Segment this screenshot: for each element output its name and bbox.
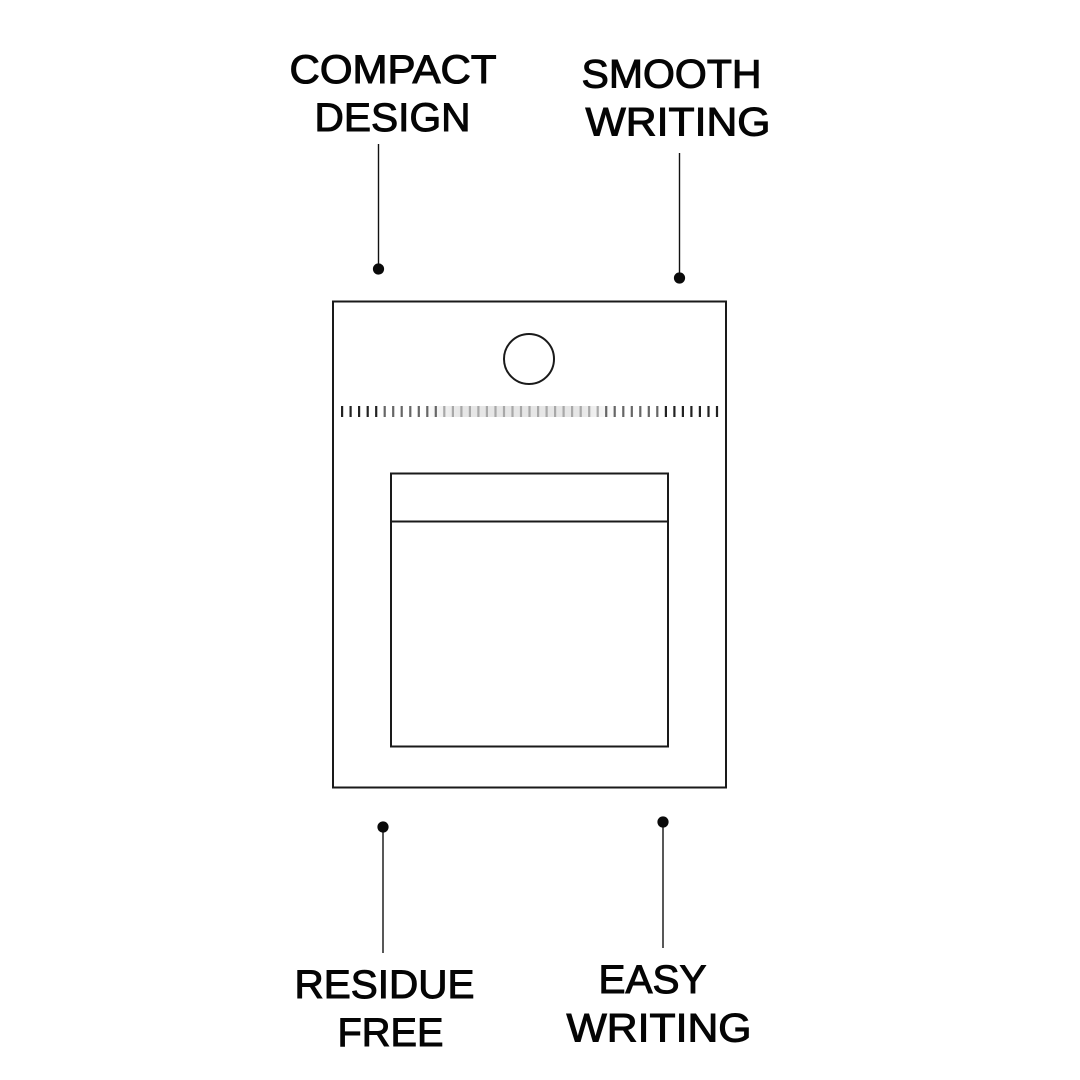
perforation line	[341, 406, 718, 417]
label: compact design	[290, 48, 496, 140]
label: smooth writing: SMOOTH	[582, 52, 762, 96]
label: easy writing	[566, 958, 752, 1050]
label: residue free	[294, 963, 474, 1055]
label: residue free: FREE	[338, 1011, 444, 1055]
callout line: smooth writing	[674, 153, 685, 284]
label: residue free: RESIDUE	[294, 963, 474, 1007]
pad top band	[391, 520, 668, 522]
callout line: residue free	[377, 821, 389, 953]
callout line: easy writing	[657, 816, 669, 948]
sticky note pad	[391, 474, 668, 746]
label: compact design: COMPACT	[290, 48, 496, 92]
callout line: compact design	[373, 144, 384, 275]
label: smooth writing: WRITING	[586, 100, 770, 144]
outer card	[333, 302, 726, 788]
label: easy writing: WRITING	[566, 1006, 752, 1050]
product outline	[333, 302, 726, 788]
label: easy writing: EASY	[598, 958, 706, 1002]
label: smooth writing	[582, 52, 770, 144]
hang hole	[504, 334, 554, 384]
label: compact design: DESIGN	[314, 96, 470, 140]
